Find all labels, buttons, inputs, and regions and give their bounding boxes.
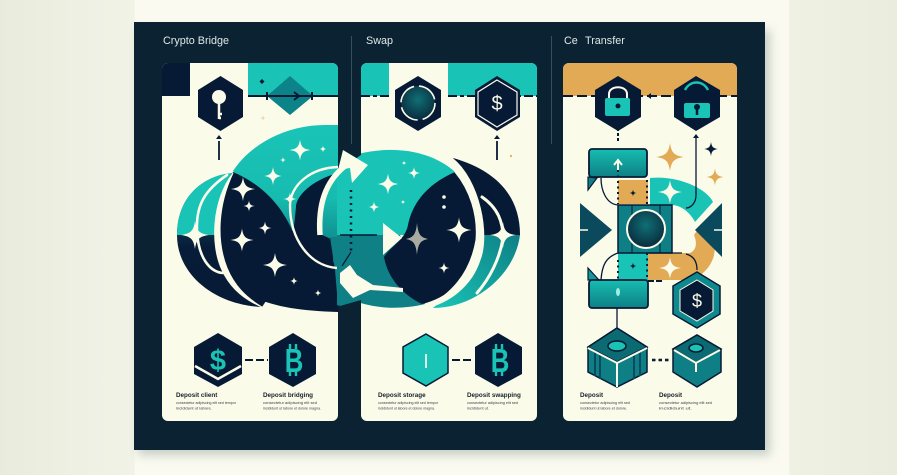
icon: open lock hexagon [674,76,720,131]
teal swoosh [650,178,713,222]
icon: teal hexagon [403,334,448,386]
right triangle [695,203,722,257]
label: deposit left [176,392,237,410]
label: deposit right: consectetur adipiscing elit sed [263,401,317,405]
label: deposit right: Deposit [659,392,683,399]
center column with orb [618,205,672,253]
icon: dollar outline hexagon: $ [491,93,503,115]
icon: dollar hexagon: $ [692,291,702,311]
icon: faint sparkle [510,155,512,157]
top band blocks [162,63,338,96]
white arcs [197,167,338,307]
icon: dollar hexagon [194,333,242,387]
label: deposit left: consectetur adipiscing elit sed tempor [176,401,237,405]
label: deposit left [580,392,630,410]
label: deposit right: consectetur adipiscing elit sed [659,401,712,405]
big dark circle [217,172,340,312]
heading: Coin Transfer: Ce [564,35,578,47]
dark circle [384,172,477,304]
outer crescent [453,158,520,235]
label: deposit right [263,392,321,410]
icon: large cube [588,328,647,387]
panel: crypto bridge [162,63,340,421]
arrow: up to dollar [494,135,500,160]
icon: bitcoin hexagon [269,333,316,387]
dark backing board [134,22,765,450]
white crescent [436,158,484,306]
gold band [563,63,737,96]
label: deposit left: incididunt ut labore et dolore magna. [378,406,435,410]
icon: faint sparkle [260,116,266,120]
panel: coin transfer [563,63,737,421]
heading: Swap: Swap [366,35,393,47]
label: deposit left: Deposit storage [378,392,426,399]
icon: bitcoin hexagon: B [491,343,509,380]
icon: key hexagon [198,76,243,131]
top bubble [588,149,647,190]
label: deposit left [378,392,439,410]
icon: white wedge arrow [383,223,402,255]
label: deposit left: incididunt ut labore. [176,406,212,410]
label: deposit left: consectetur adipiscing elit sed tempor [378,401,439,405]
connector lines [601,128,697,328]
sparkles [181,140,326,296]
gold square [618,180,648,204]
teal body [361,150,454,235]
arrow: up to key [216,135,222,160]
icon: locked hexagon [595,76,641,131]
teal square [618,253,648,280]
icon: dollar outline hexagon [475,76,520,131]
dark teal right block [330,237,337,293]
label: deposit left: consectetur adipiscing elit sed [580,401,630,405]
sparkles [368,160,516,274]
panel: swap [361,63,537,421]
arrowheads [647,93,699,138]
label: deposit right [467,392,521,410]
label: deposit right [659,392,712,410]
gold lower swoosh [648,222,715,280]
big teal cap [233,125,338,270]
icon: diamond with arrow [248,76,338,115]
label: deposit right: consectetur adipiscing elit sed [467,401,518,405]
label: deposit left: Deposit [580,392,604,399]
top band blocks [361,63,537,96]
label: deposit left: incididunt ut labore et dolore. [580,406,627,410]
label: deposit right: incididunt ut labore et dolore magna. [263,406,321,410]
label: deposit right: incididunt ut. [467,406,489,410]
icon: dollar hexagon [673,272,720,328]
icon: dollar hexagon: $ [210,345,226,377]
label: deposit right: Deposit bridging [263,392,313,399]
sparkles [630,142,724,279]
left lobe [177,173,266,307]
heading: Coin Transfer: Transfer [585,35,625,47]
icon: bitcoin hexagon: B [285,343,303,380]
icon: orb hexagon [395,76,441,131]
icon: bitcoin hexagon [475,333,522,387]
label: deposit right: Deposit swapping [467,392,521,399]
heading: Crypto Bridge: Crypto Bridge [163,35,229,47]
icon: small cube [673,335,721,387]
label: deposit right: incididunt ut. [659,406,692,410]
second dark lobe [292,174,333,263]
overlap: arrows crossing the gutter [320,150,403,306]
left triangle [580,203,612,257]
lower bubble [588,268,648,308]
label: deposit left: Deposit client [176,392,218,399]
